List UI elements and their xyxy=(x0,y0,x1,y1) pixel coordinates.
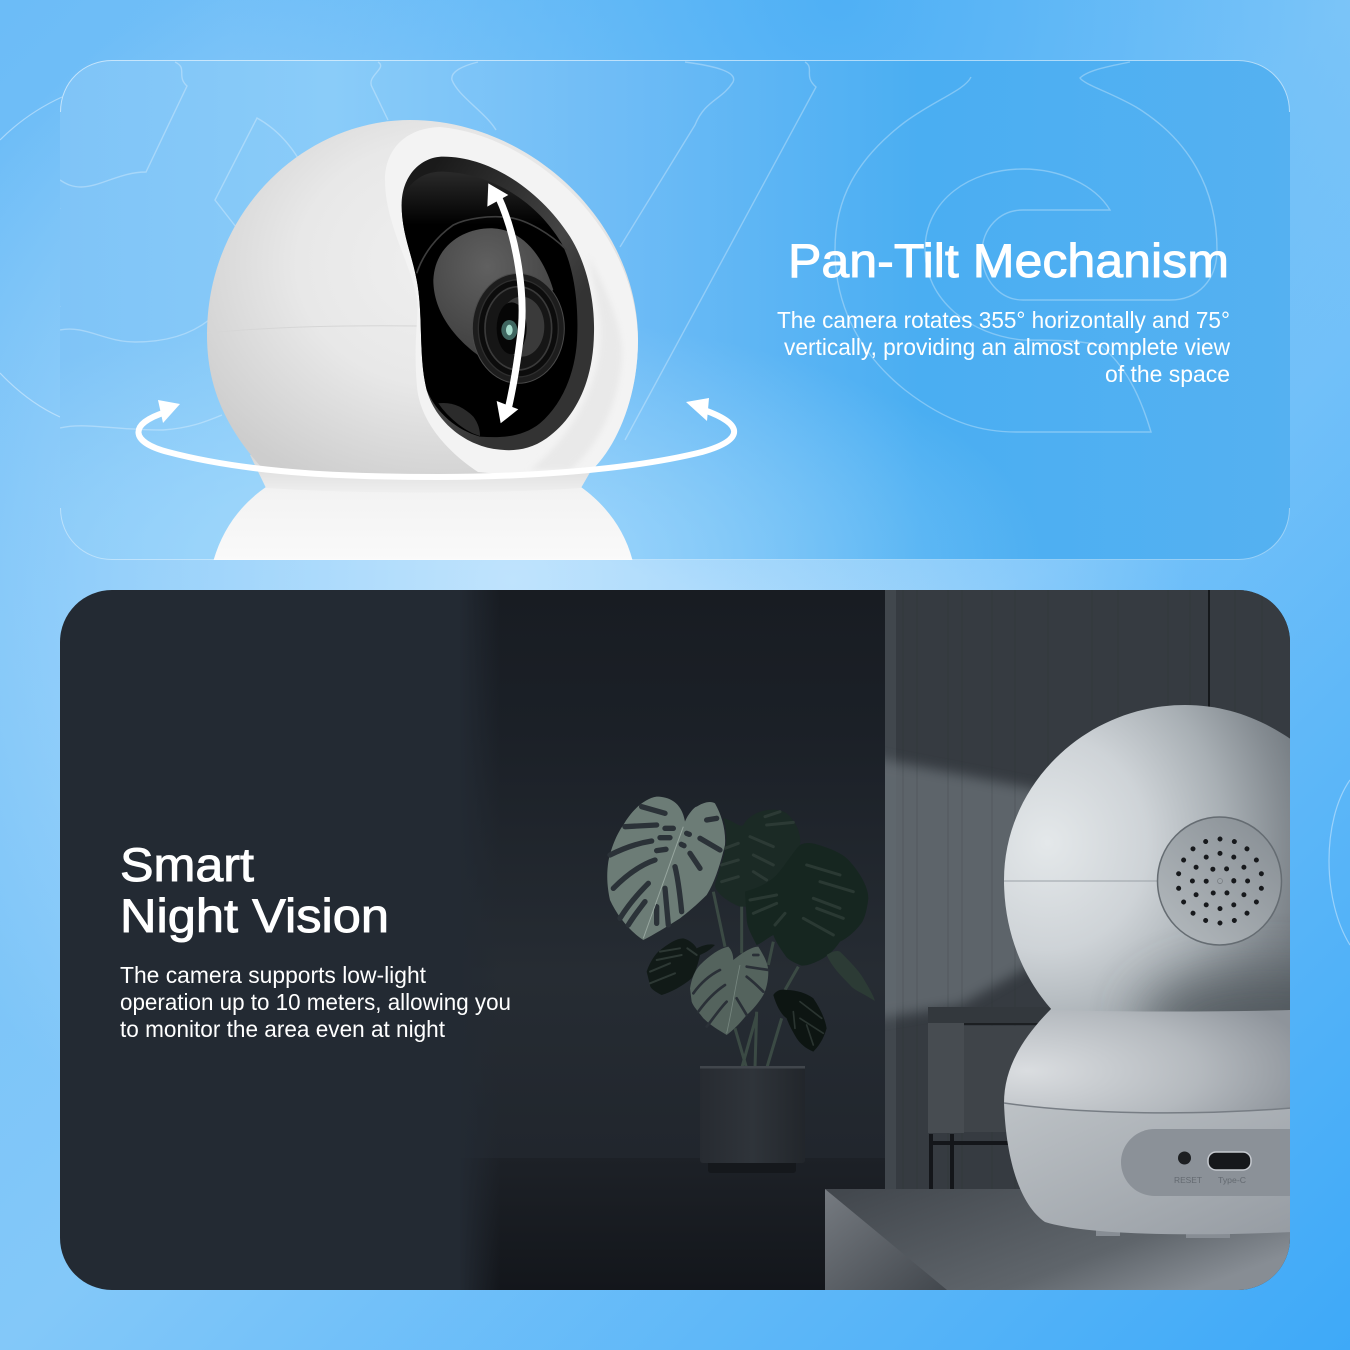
head seam xyxy=(1004,880,1160,882)
lens housing xyxy=(433,228,553,357)
leaf: large dark right xyxy=(745,843,868,966)
text: night vision description: to monitor the area even at night xyxy=(120,1016,445,1042)
panel glow xyxy=(60,60,1290,560)
panel background card xyxy=(60,60,1290,560)
panel: pan-tilt mechanism xyxy=(40,60,1290,562)
leaf: pale lower xyxy=(690,947,768,1035)
heading: Pan-Tilt Mechanism: Pan-Tilt Mechanism xyxy=(788,234,1229,287)
camera head xyxy=(207,120,638,478)
reset button xyxy=(1178,1152,1191,1164)
panel: smart night vision xyxy=(60,590,1350,1295)
leaf: dark low right xyxy=(773,990,827,1052)
plant pot xyxy=(700,1066,805,1173)
text: pan-tilt description: vertically, providing an almost complete view xyxy=(784,334,1231,360)
side cabinet xyxy=(928,1007,1038,1189)
text: pan-tilt description: of the space xyxy=(1105,361,1230,387)
leaf: large dark back xyxy=(715,810,800,907)
arrow: vertical tilt xyxy=(487,183,522,423)
small reflection xyxy=(438,403,480,436)
USB-C port xyxy=(1208,1152,1251,1170)
stems xyxy=(712,892,800,1066)
port labels xyxy=(1174,1175,1246,1185)
camera rear xyxy=(1004,705,1290,1238)
panel dark photo background xyxy=(60,590,1350,1295)
lens cavity xyxy=(402,172,577,437)
panel border xyxy=(60,60,1290,560)
wall edge blend xyxy=(460,590,486,1290)
dark back wall xyxy=(478,590,885,810)
text: pan-tilt description: The camera rotates 355° horizontally and 75° xyxy=(777,307,1230,333)
plant xyxy=(607,797,875,1068)
arrow: horizontal pan xyxy=(138,398,734,477)
lens barrel xyxy=(472,273,564,383)
text: pan-tilt description xyxy=(777,307,1231,387)
text: night vision description: The camera supports low-light xyxy=(120,962,426,988)
camera base xyxy=(213,487,633,562)
port labels: Type-C xyxy=(1218,1175,1246,1185)
floor xyxy=(483,1194,825,1290)
body xyxy=(1004,1008,1292,1113)
heading: Smart Night Vision: Smart xyxy=(120,838,254,891)
leaf: large pale left xyxy=(607,797,725,940)
wood wall xyxy=(870,590,1295,1190)
head seam xyxy=(207,326,638,334)
heading: Smart Night Vision xyxy=(120,838,389,942)
face plate inner shade xyxy=(541,282,619,468)
counter xyxy=(825,1189,1295,1295)
face plate xyxy=(385,127,638,475)
housing rim arc xyxy=(417,217,567,273)
base feet xyxy=(1096,1230,1230,1238)
leaf: small tail xyxy=(827,951,875,1001)
head lower shadow xyxy=(1118,943,1290,1012)
heading: Smart Night Vision: Night Vision xyxy=(120,889,389,942)
camera: white pan-tilt unit xyxy=(207,120,638,562)
port labels: RESET xyxy=(1174,1175,1202,1185)
lens opening rim xyxy=(402,157,594,450)
text: night vision description xyxy=(120,962,511,1042)
camera neck xyxy=(250,455,590,488)
base xyxy=(1004,1103,1292,1234)
text: night vision description: operation up to 10 meters, allowing you xyxy=(120,989,511,1015)
lens assembly xyxy=(402,157,594,450)
port recess xyxy=(1121,1129,1292,1196)
head xyxy=(1004,705,1292,1012)
decorative curves xyxy=(40,62,1217,440)
base seam xyxy=(1004,1103,1292,1113)
speaker xyxy=(1158,817,1282,945)
leaf: small dark left xyxy=(647,938,715,995)
